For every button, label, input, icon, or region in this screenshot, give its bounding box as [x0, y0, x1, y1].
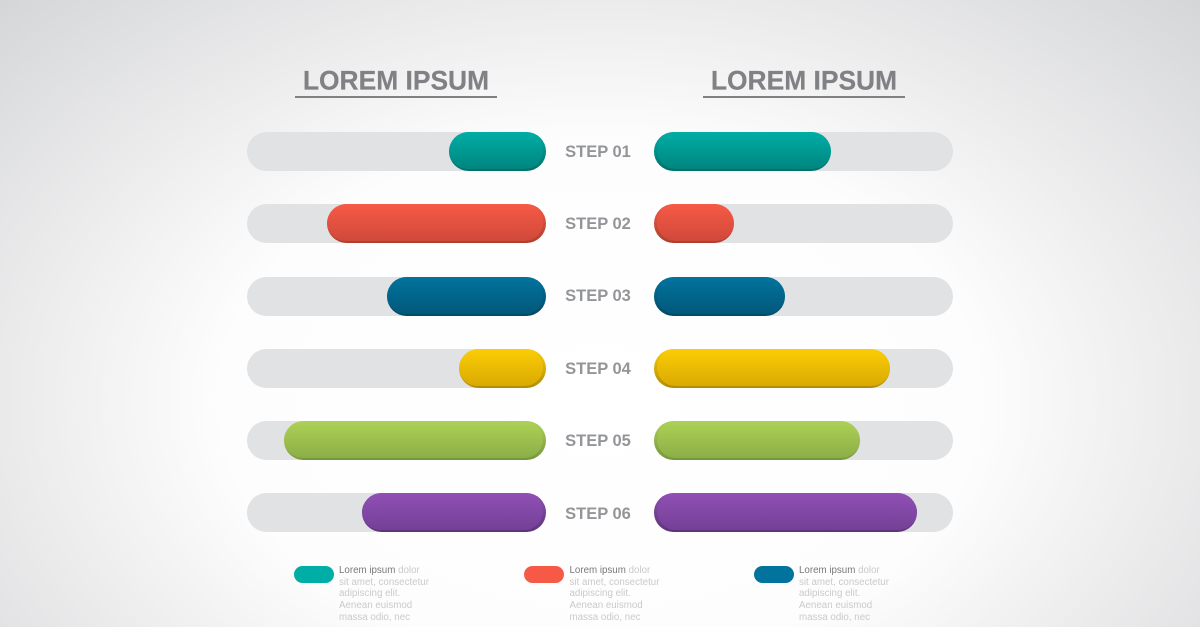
bar: step 04 right: [654, 349, 890, 388]
track: step 05 left: [247, 421, 546, 460]
track: step 05 right: [654, 421, 953, 460]
legend text: blue: Aenean euismod: [799, 600, 872, 611]
legend text: teal: adipiscing elit.: [339, 588, 400, 599]
label: step 06: STEP 06: [565, 505, 631, 523]
label: step 03: STEP 03: [565, 287, 631, 305]
heading: left column: LOREM IPSUM: [303, 65, 489, 95]
legend text: blue: adipiscing elit.: [799, 588, 860, 599]
track: step 01 left: [247, 132, 546, 171]
legend text: blue: massa odio, nec: [799, 612, 870, 623]
bar: step 05 right: [654, 421, 860, 460]
legend text: teal: [339, 565, 429, 623]
legend text: blue: [799, 565, 889, 623]
legend text: red: [570, 565, 660, 623]
legend text: teal: sit amet, consectetur: [339, 577, 429, 588]
legend text: red: sit amet, consectetur: [570, 577, 659, 588]
heading: right column: LOREM IPSUM: [711, 65, 897, 95]
legend text: blue: Lorem ipsum dolor: [799, 565, 880, 576]
legend text: red: Lorem ipsum dolor: [570, 565, 650, 576]
bar: step 02 right: [654, 204, 734, 243]
track: step 03 right: [654, 277, 953, 316]
track: step 06 right: [654, 493, 953, 532]
track: step 06 left: [247, 493, 546, 532]
bar: step 06 left: [362, 493, 546, 532]
bar: step 05 left: [284, 421, 546, 460]
bar: step 06 right: [654, 493, 917, 532]
bar: step 02 left: [327, 204, 546, 243]
legend text: teal: Aenean euismod: [339, 600, 412, 611]
legend swatch: red: [524, 566, 564, 583]
legend text: blue: sit amet, consectetur: [799, 577, 889, 588]
track: step 04 right: [654, 349, 953, 388]
legend text: red: massa odio, nec: [570, 612, 640, 623]
bar: step 03 right: [654, 277, 785, 316]
label: step 05: STEP 05: [565, 432, 631, 450]
label: step 04: STEP 04: [565, 360, 631, 378]
bar: step 01 left: [449, 132, 546, 171]
track: step 02 left: [247, 204, 546, 243]
legend text: teal: massa odio, nec: [339, 612, 410, 623]
label: step 01: STEP 01: [565, 143, 631, 161]
legend text: red: Aenean euismod: [570, 600, 643, 611]
legend swatch: teal: [294, 566, 334, 583]
bar: step 01 right: [654, 132, 831, 171]
label: step 02: STEP 02: [565, 215, 631, 233]
legend text: red: adipiscing elit.: [570, 588, 631, 599]
track: step 02 right: [654, 204, 953, 243]
track: step 01 right: [654, 132, 953, 171]
legend swatch: blue: [754, 566, 794, 583]
bar: step 03 left: [387, 277, 546, 316]
bar: step 04 left: [459, 349, 546, 388]
legend text: teal: Lorem ipsum dolor: [339, 565, 420, 576]
track: step 03 left: [247, 277, 546, 316]
track: step 04 left: [247, 349, 546, 388]
